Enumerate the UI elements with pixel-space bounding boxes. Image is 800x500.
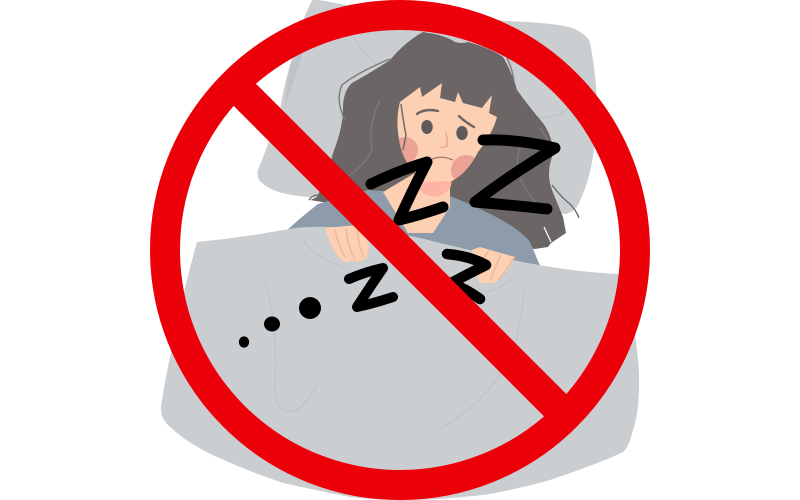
neck xyxy=(383,170,450,233)
hair xyxy=(309,32,579,249)
large Z xyxy=(475,140,555,209)
eyebrows xyxy=(417,110,474,127)
sleep dots and letters xyxy=(239,140,555,348)
prohibition sign xyxy=(165,15,635,485)
pillow xyxy=(258,0,597,214)
shirt xyxy=(285,190,541,268)
cheeks xyxy=(398,137,475,180)
face xyxy=(392,83,497,185)
neck shadow xyxy=(418,178,452,197)
dots xyxy=(239,297,321,348)
right hand xyxy=(472,247,515,283)
left hand xyxy=(325,225,369,262)
small Z xyxy=(349,268,393,307)
lower right Z xyxy=(447,254,486,299)
face side strand xyxy=(401,104,406,150)
eyes xyxy=(421,120,433,134)
illustration: no sleep sign over woman in bed xyxy=(150,0,650,500)
blanket xyxy=(161,227,639,500)
hair strands xyxy=(339,58,550,205)
middle Z xyxy=(371,162,443,220)
nose xyxy=(440,133,447,147)
mouth xyxy=(432,157,453,160)
